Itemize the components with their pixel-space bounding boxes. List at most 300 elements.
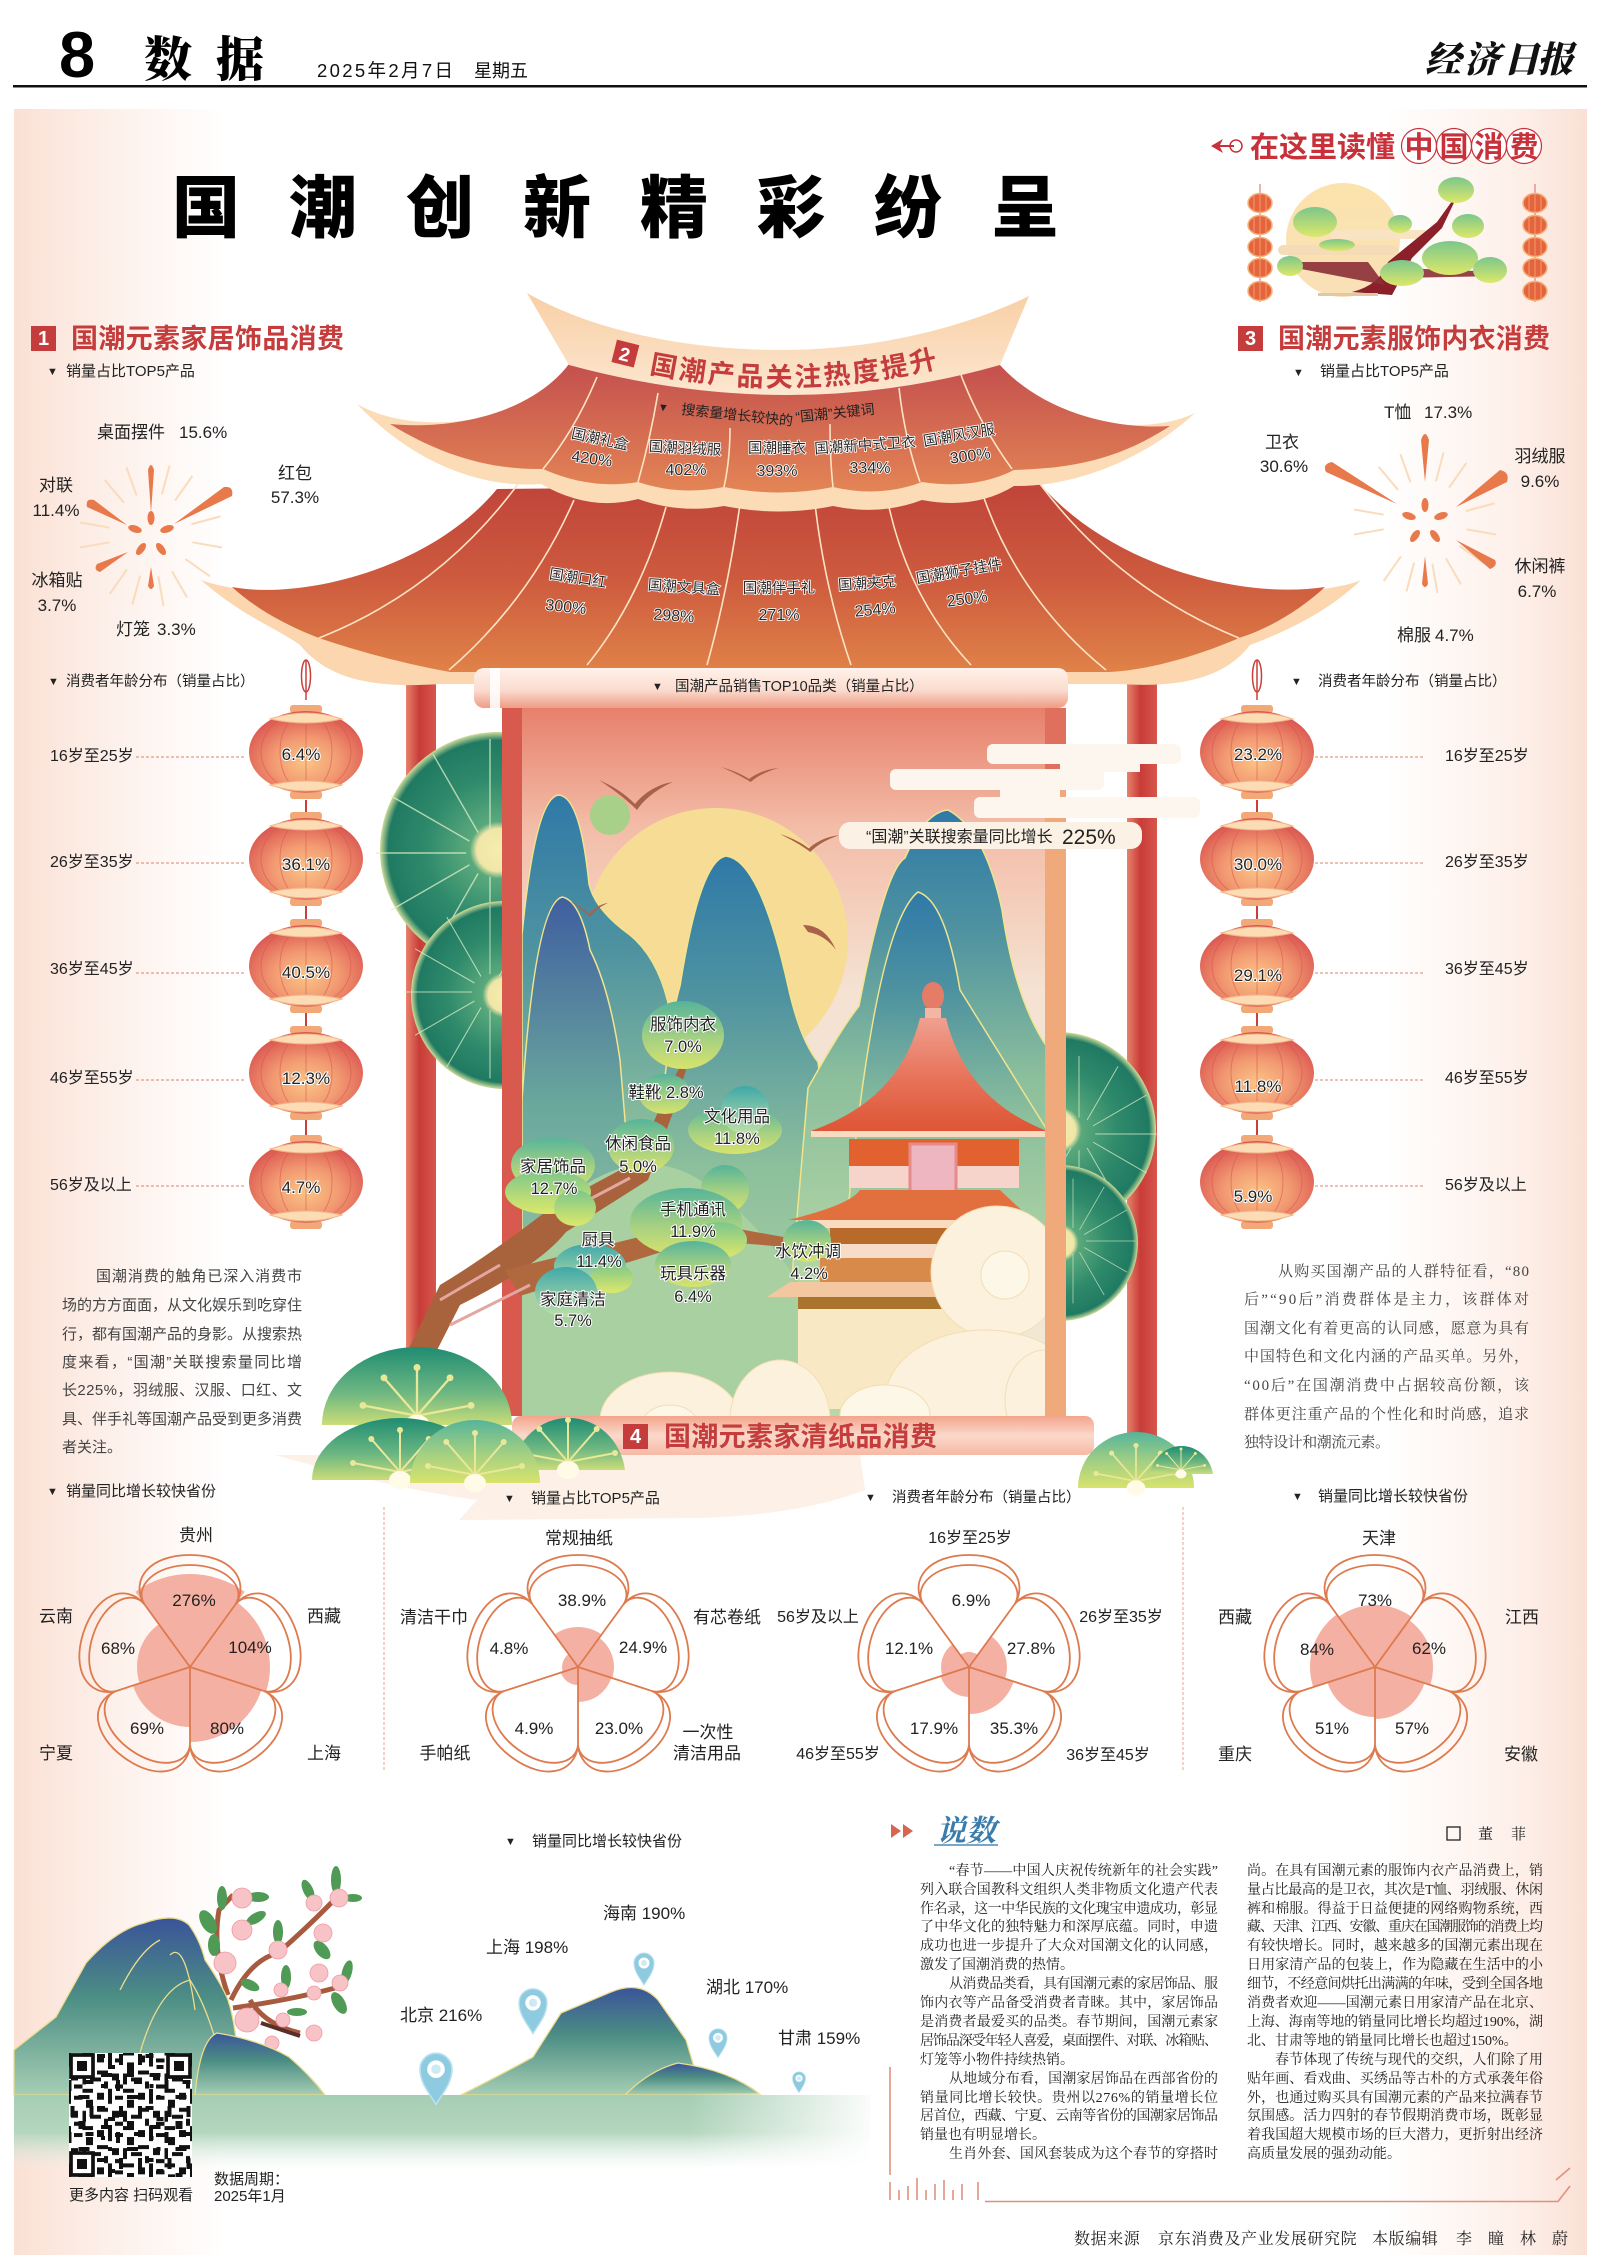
hill: middle — [625, 2063, 761, 2095]
commentary column 1: 作名录，这一中华民族的文化瑰宝申遗成功，彰显 — [920, 1900, 1218, 1917]
subhead: province growth B: 销量同比增长较快省份 — [1318, 1487, 1468, 1505]
tree trunk — [408, 1066, 800, 1360]
flower chart: paper age — [777, 1529, 1163, 1787]
flower chart: paper top5: 一次性 — [682, 1723, 734, 1742]
subhead: province growth A: ▼ — [47, 1486, 58, 1498]
age labels: home decor: 56岁及以上 — [50, 1176, 132, 1194]
age labels: home decor: 26岁至35岁 — [50, 853, 134, 871]
pine: 手机通讯: 手机通讯 — [660, 1200, 726, 1219]
keyword: 国潮伴手礼: 271% — [759, 607, 799, 624]
top scroll rod: ▼ — [652, 681, 663, 693]
subhead: province growth B: ▼ — [1292, 1491, 1303, 1503]
text block: right intro: 后”“90后”消费群体是主力，该群体对 — [1244, 1290, 1529, 1308]
roof: upper tier tiles — [390, 364, 1170, 492]
firework chart: apparel top5: 羽绒服 — [1514, 447, 1566, 466]
keyword: 国潮新中式卫衣 — [814, 433, 916, 477]
firework chart: home decor top5: 3.3% — [157, 620, 196, 639]
pine: 文化用品: 11.8% — [714, 1130, 760, 1148]
flower chart: paper provinces — [1218, 1529, 1539, 1787]
scene: landscape — [522, 794, 1045, 1416]
subhead: apparel top5: 销量占比TOP5产品 — [1320, 363, 1449, 380]
flower chart: paper top5: 4.8% — [490, 1639, 528, 1658]
footer credits: 蔚 — [1552, 2230, 1569, 2248]
subhead: apparel age: 消费者年龄分布（销量占比） — [1318, 673, 1506, 690]
text block: left intro: 度来看，“国潮”关联搜索量同比增 — [62, 1354, 302, 1371]
series badge: 中国消费 — [1404, 131, 1539, 164]
firework chart: apparel top5: 6.7% — [1518, 582, 1556, 601]
keyword: 国潮狮子挂件 — [915, 556, 1003, 611]
lantern: 46-55 — [249, 1026, 363, 1120]
age labels: home decor: 36岁至45岁 — [50, 960, 134, 978]
firework chart: apparel top5: 30.6% — [1260, 457, 1308, 476]
callout: search growth: 225% — [1062, 826, 1116, 849]
flower chart: paper provinces: 西藏 — [1218, 1608, 1252, 1627]
keyword: 国潮口红: 300% — [545, 597, 587, 618]
pine: 厨具 — [554, 1231, 633, 1293]
commentary column 2: 细节，不经意间烘托出满满的年味，受到全国各地 — [1247, 1975, 1543, 1992]
top scroll rod: 国潮产品销售TOP10品类（销量占比） — [675, 678, 924, 695]
callout: search growth — [839, 822, 1142, 849]
pillars — [406, 670, 1157, 1460]
scroll body — [502, 708, 1066, 1416]
pine: 玩具乐器: 6.4% — [674, 1288, 712, 1306]
map pins and labels — [400, 1904, 860, 2104]
weekday: 星期五 — [474, 61, 528, 81]
commentary column 2: 氛围感。活力四射的春节假期消费市场，既彰显 — [1247, 2107, 1543, 2124]
pine: 家庭清洁 — [535, 1267, 606, 1330]
commentary column 1: 居首位，西藏、宁夏、云南等省份的国潮家居饰品 — [920, 2107, 1218, 2124]
subhead: map: ▼ — [505, 1836, 516, 1848]
mountain: front left — [522, 896, 626, 1229]
commentary column 2: 日用家清产品的包装上，作为隐藏在生活中的小 — [1247, 1956, 1544, 1973]
text block: right intro: 国潮文化有着更高的认同感，愿意为具有 — [1244, 1319, 1529, 1337]
commentary column 1: 成功也进一步提升了大众对国潮文化的认同感， — [920, 1937, 1218, 1954]
flower chart: home decor provinces: 上海 — [307, 1744, 341, 1763]
flower chart: paper age: 26岁至35岁 — [1079, 1608, 1163, 1626]
flower chart: home decor provinces: 69% — [130, 1719, 164, 1738]
keyword: 国潮新中式卫衣: 334% — [850, 460, 890, 477]
pine: 文化用品: 文化用品 — [704, 1107, 770, 1126]
flower chart: paper top5: 清洁干巾 — [400, 1608, 468, 1627]
sun — [593, 808, 848, 1038]
firework chart: apparel top5: 卫衣 — [1265, 433, 1299, 452]
subhead: province growth A: 销量同比增长较快省份 — [66, 1482, 216, 1500]
pin: 甘肃: 甘肃 159% — [778, 2029, 860, 2048]
age labels: home decor: 16岁至25岁 — [50, 747, 134, 765]
lantern: 56+ — [249, 1135, 363, 1229]
mountain: back left — [522, 794, 668, 1122]
firework chart: home decor top5: 灯笼 — [116, 620, 150, 639]
lantern: 56+: 5.9% — [1234, 1187, 1272, 1206]
flower chart: paper provinces: 天津 — [1362, 1529, 1396, 1548]
flower chart: home decor provinces: 276% — [172, 1591, 216, 1610]
clouds — [600, 1206, 1045, 1416]
subhead: paper age: 消费者年龄分布（销量占比） — [892, 1489, 1080, 1506]
pin: 海南: 海南 190% — [603, 1904, 685, 1923]
pine: 水饮冲调: 水饮冲调 — [775, 1242, 841, 1261]
flower chart: paper top5 — [400, 1529, 761, 1787]
commentary column 2: 高质量发展的强劲动能。 — [1247, 2145, 1401, 2162]
flower chart: paper age: 27.8% — [1007, 1639, 1055, 1658]
age labels: apparel — [1315, 747, 1529, 1194]
pine: 休闲食品: 5.0% — [619, 1158, 657, 1176]
lantern: 36-45 — [249, 919, 363, 1013]
commentary column 2: 裤和棉服。得益于日益便捷的网络购物系统，西 — [1247, 1900, 1543, 1917]
keyword: 国潮夹克 — [838, 573, 897, 621]
lantern column: apparel age — [1200, 660, 1314, 1229]
text block: left intro: 具、伴手礼等国潮产品受到更多消费 — [62, 1410, 302, 1428]
QR caption: 更多内容 扫码观看 — [69, 2187, 193, 2204]
flower chart: paper top5: 常规抽纸 — [545, 1529, 613, 1548]
pin: 湖北: 湖北 170% — [706, 1978, 788, 1997]
keyword: 国潮口红 — [545, 566, 608, 618]
series badge: 在这里读懂 — [1250, 131, 1395, 164]
commentary column 1: 灯笼等小物件持续热销。 — [920, 2051, 1074, 2068]
lantern: 16-25 — [1200, 705, 1314, 799]
temple roof — [201, 293, 1361, 686]
age labels: apparel: 46岁至55岁 — [1445, 1069, 1529, 1087]
lantern: 26-35: 36.1% — [282, 855, 330, 874]
keyword: 国潮狮子挂件: 国潮狮子挂件 — [915, 556, 1003, 587]
section 1 heading: 1 — [38, 328, 49, 350]
mountain: centre — [664, 856, 840, 1416]
keyword: 国潮礼盒: 国潮礼盒 — [570, 425, 631, 454]
flower chart: paper provinces: 57% — [1395, 1719, 1429, 1738]
commentary column 1: 生肖外套、国风套装成为这个春节的穿搭时 — [949, 2145, 1218, 2162]
subhead: paper top5: 销量占比TOP5产品 — [531, 1490, 660, 1507]
keyword: 国潮狮子挂件: 250% — [946, 588, 989, 611]
commentary column 1: 销量也有明显增长。 — [920, 2126, 1046, 2143]
title: 国潮创新精彩纷呈 — [172, 171, 1059, 247]
footer credits: 李 — [1456, 2230, 1473, 2248]
firework chart: home decor top5: 冰箱贴 — [32, 571, 82, 590]
age labels: home decor — [50, 747, 245, 1194]
flower chart: paper age: 35.3% — [990, 1719, 1038, 1738]
bottom scroll rod — [512, 1416, 1094, 1455]
keyword: 国潮羽绒服: 国潮羽绒服 — [648, 438, 722, 459]
keyword: 国潮夹克: 国潮夹克 — [838, 573, 897, 594]
text block: left intro: 国潮消费的触角已深入消费市 — [96, 1268, 302, 1285]
lantern: 46-55 — [1200, 1026, 1314, 1120]
keyword: 国潮伴手礼 — [743, 580, 815, 624]
pine: 鞋靴 — [628, 1074, 704, 1114]
flower chart: home decor provinces — [39, 1526, 341, 1787]
text block: right intro: 从购买国潮产品的人群特征看，“80 — [1278, 1263, 1529, 1280]
firework chart: home decor top5: 红包 — [278, 464, 312, 483]
flower chart: paper age: 56岁及以上 — [777, 1608, 859, 1626]
pin: 甘肃 — [778, 2029, 860, 2093]
pine: 家居饰品: 家居饰品 — [520, 1157, 586, 1176]
flower chart: paper provinces: 73% — [1358, 1591, 1392, 1610]
age labels: apparel: 16岁至25岁 — [1445, 747, 1529, 765]
flower chart: home decor provinces: 云南 — [39, 1607, 73, 1626]
date: 2025年2月7日 — [317, 60, 453, 81]
subhead: paper top5: ▼ — [504, 1493, 515, 1505]
roof: upper tier edge — [357, 370, 1195, 512]
lantern: 36-45: 40.5% — [282, 963, 330, 982]
roof: lower tier tiles — [232, 484, 1325, 672]
text block: left intro: 场的方方面面，从文化娱乐到吃穿住 — [62, 1297, 302, 1314]
lantern: 56+ — [1200, 1135, 1314, 1229]
blossom branch — [195, 1866, 362, 2050]
commentary column 2: 贴年画、看戏曲、买绣品等古朴的方式承袭年俗 — [1247, 2070, 1543, 2087]
flower chart: paper top5: 清洁用品 — [673, 1744, 741, 1763]
commentary column 2: 北、甘肃等地的销量同比增长也超过150%。 — [1247, 2032, 1518, 2049]
flower chart: paper provinces: 51% — [1315, 1719, 1349, 1738]
pine: 服饰内衣: 服饰内衣 — [650, 1015, 716, 1034]
flower chart: paper top5: 23.0% — [595, 1719, 643, 1738]
keyword: 国潮睡衣 — [748, 440, 806, 480]
scroll side stripes — [502, 708, 1066, 1416]
data period: 2025年1月 — [214, 2188, 286, 2205]
commentary column 1: 居饰品深受年轻人喜爱，桌面摆件、对联、冰箱贴、 — [920, 2032, 1218, 2049]
commentary column 2 — [1247, 1862, 1544, 2162]
mountain: left — [14, 1918, 240, 2095]
newspaper logo: 经济日报 — [1425, 40, 1578, 80]
pine: 手机通讯 — [630, 1188, 747, 1258]
temple — [767, 982, 1047, 1409]
icon: arrow — [1211, 139, 1234, 153]
footer credits: 本版编辑 — [1372, 2230, 1438, 2248]
pine: unlabelled tuft — [701, 1165, 749, 1213]
pine: 鞋靴: 鞋靴 2.8% — [628, 1083, 704, 1102]
keyword: 国潮新中式卫衣: 国潮新中式卫衣 — [814, 433, 916, 458]
text block: left intro: 者关注。 — [62, 1439, 122, 1456]
pine: 文化用品 — [688, 1086, 782, 1154]
flower chart: home decor provinces: 80% — [210, 1719, 244, 1738]
roof: lower tier edge — [201, 580, 1361, 685]
flower chart: paper age: 36岁至45岁 — [1066, 1746, 1150, 1764]
subhead: paper age: ▼ — [865, 1492, 876, 1504]
footer credits: 林 — [1520, 2230, 1537, 2248]
byline: 董 — [1478, 1825, 1493, 1843]
pine: 手机通讯: 11.9% — [670, 1223, 716, 1241]
flower chart: paper age: 46岁至55岁 — [796, 1745, 880, 1763]
subhead: home top5: 销量占比TOP5产品 — [66, 363, 195, 380]
lantern: 26-35 — [249, 812, 363, 906]
lantern: 56+: 4.7% — [282, 1178, 320, 1197]
commentary column 2: 藏、天津、江西、安徽、重庆在国潮服饰的消费上均 — [1247, 1918, 1543, 1935]
lantern: 36-45: 29.1% — [1234, 966, 1282, 985]
footer credits: 京东消费及产业发展研究院 — [1158, 2230, 1357, 2248]
commentary column 2: 春节体现了传统与现代的交织，人们除了用 — [1275, 2051, 1543, 2068]
top scroll rod — [474, 668, 1068, 708]
text block: right intro: 中国特色和文化内涵的产品买单。另外， — [1244, 1348, 1529, 1365]
byline — [1447, 1825, 1526, 1843]
hill: left — [195, 2033, 325, 2095]
data period: 数据周期： — [214, 2171, 289, 2188]
keyword: 国潮夹克: 254% — [854, 600, 896, 621]
firework chart: apparel top5: 17.3% — [1424, 403, 1472, 422]
pine: 休闲食品 — [605, 1119, 674, 1176]
flower chart: home decor provinces: 西藏 — [307, 1607, 341, 1626]
commentary column 2: 消费者欢迎——国潮元素日用家清产品在北京、 — [1247, 1994, 1543, 2011]
firework chart: home decor top5: 11.4% — [33, 501, 79, 520]
subhead: home age: 消费者年龄分布（销量占比） — [66, 673, 254, 690]
water band — [14, 2093, 880, 2173]
keyword: 国潮口红: 国潮口红 — [548, 566, 608, 591]
keyword: 国潮风汉服 — [922, 421, 997, 468]
section 2 heading: 2 — [617, 344, 632, 367]
pin: 湖北 — [706, 1978, 788, 2058]
pine: 服饰内衣 — [642, 1001, 724, 1069]
footer credits: 数据来源 — [1074, 2230, 1141, 2248]
flower chart: home decor provinces: 宁夏 — [39, 1744, 73, 1763]
section 3 heading: 3 — [1245, 328, 1256, 350]
section 1 heading: 国潮元素家居饰品消费 — [71, 324, 344, 354]
commentary column 2: 量占比最高的是卫衣，其次是T恤、羽绒服、休闲 — [1247, 1881, 1543, 1898]
pin: 北京 — [400, 2006, 482, 2104]
keyword: 国潮风汉服: 300% — [949, 445, 992, 468]
commentary column 1: 列入联合国教科文组织人类非物质文化遗产代表 — [920, 1881, 1218, 1898]
pine fans: lower left — [312, 1347, 625, 1492]
lantern: 46-55: 11.8% — [1235, 1077, 1281, 1096]
footer credits — [1074, 2230, 1569, 2248]
flower chart: paper top5: 有芯卷纸 — [693, 1608, 761, 1627]
subhead: keywords: 搜索量增长较快的 — [681, 401, 794, 429]
age labels: apparel: 26岁至35岁 — [1445, 853, 1529, 871]
masthead — [13, 18, 1587, 91]
subhead: home age: ▼ — [48, 676, 59, 688]
pine: 家居饰品: 12.7% — [531, 1180, 578, 1198]
commentary column 1: 从地域分布看，国潮家居饰品在西部省份的 — [949, 2070, 1218, 2087]
commentary column 2: 上海、海南等地的销量同比增长均超过190%，湖 — [1247, 2013, 1543, 2030]
commentary column 1: 了中华文化的独特魅力和深厚底蕴。同时，申遗 — [920, 1918, 1218, 1935]
pine: 水饮冲调: 4.2% — [790, 1265, 828, 1283]
text block: right intro: 独特设计和潮流元素。 — [1244, 1434, 1390, 1451]
subhead: apparel age: ▼ — [1291, 676, 1302, 688]
pine: 休闲食品: 休闲食品 — [605, 1134, 671, 1153]
keyword: 国潮礼盒 — [570, 425, 631, 471]
keyword: 国潮睡衣: 国潮睡衣 — [748, 440, 806, 457]
cloud strips — [890, 744, 1200, 818]
text block: left intro: 长225%，羽绒服、汉服、口红、文 — [62, 1382, 302, 1399]
flower chart: paper top5: 38.9% — [558, 1591, 606, 1610]
lantern: 26-35 — [1200, 812, 1314, 906]
keyword: 国潮羽绒服 — [648, 438, 722, 479]
section 3 heading: 国潮元素服饰内衣消费 — [1278, 324, 1550, 354]
section 4 heading: 4 — [630, 1426, 642, 1448]
text block: right intro: 群体更注重产品的个性化和时尚感，追求 — [1244, 1405, 1529, 1423]
flower chart: paper top5: 手帕纸 — [420, 1744, 470, 1763]
commentary column 2: 有较快增长。同时，越来越多的国潮元素出现在 — [1247, 1937, 1543, 1954]
firework chart: apparel top5: 9.6% — [1521, 472, 1559, 491]
pin: 北京: 北京 216% — [400, 2006, 482, 2025]
pin: 上海 — [486, 1938, 568, 2034]
section name: 数据 — [144, 34, 264, 87]
green foothill — [522, 1164, 810, 1420]
firework chart: home decor top5: 15.6% — [179, 423, 227, 442]
lantern column: home decor age — [249, 660, 363, 1229]
byline: 菲 — [1511, 1826, 1526, 1843]
flower chart: paper provinces: 安徽 — [1504, 1745, 1538, 1764]
pine: 家庭清洁: 家庭清洁 — [540, 1290, 606, 1309]
firework chart: home decor top5: 对联 — [39, 476, 73, 495]
keyword: 国潮睡衣: 393% — [757, 463, 797, 480]
flower chart: paper provinces: 84% — [1300, 1640, 1334, 1659]
firework chart: home decor top5: 桌面摆件 — [97, 423, 165, 442]
text block: right intro: “00后”在国潮消费中占据较高份额，该 — [1244, 1376, 1530, 1394]
commentary column 1: 饰内衣等产品备受消费者青睐。其中，家居饰品 — [920, 1994, 1218, 2011]
lantern: 36-45 — [1200, 919, 1314, 1013]
flower chart: paper age: 6.9% — [952, 1591, 990, 1610]
page number: 8 — [59, 18, 95, 91]
mountain: right — [790, 810, 1047, 1300]
firework chart: apparel top5: 休闲裤 — [1514, 557, 1566, 576]
lantern: 16-25 — [249, 705, 363, 799]
text block: left intro: 行，都有国潮产品的身影。从搜索热 — [62, 1326, 302, 1343]
landscape strip — [14, 1866, 880, 2173]
firework chart: apparel top5 — [1260, 403, 1566, 645]
flower chart: paper age: 17.9% — [910, 1719, 958, 1738]
pine: 厨具: 厨具 — [582, 1231, 614, 1249]
flower chart: paper age: 12.1% — [885, 1639, 933, 1658]
keyword: 国潮风汉服: 国潮风汉服 — [922, 421, 997, 450]
commentary heading — [891, 1815, 1001, 1848]
keyword: 国潮文具盒 — [647, 576, 721, 626]
series badge — [1211, 128, 1542, 164]
keyword: 国潮伴手礼: 国潮伴手礼 — [743, 580, 815, 597]
lantern: 16-25: 23.2% — [1234, 745, 1282, 764]
pine: 厨具: 11.4% — [576, 1253, 622, 1271]
flower chart: paper age: 16岁至25岁 — [928, 1529, 1012, 1547]
subhead: home top5: ▼ — [47, 366, 58, 378]
pine fans: lower right — [1078, 1432, 1213, 1496]
scroll: top10 categories — [502, 708, 1066, 1416]
flower chart: home decor provinces: 104% — [228, 1638, 272, 1657]
pine: 玩具乐器: 玩具乐器 — [660, 1264, 726, 1283]
pine: 家庭清洁: 5.7% — [554, 1312, 592, 1330]
subhead: map: 销量同比增长较快省份 — [532, 1832, 682, 1850]
QR code — [69, 2053, 192, 2177]
commentary column 1: 是消费者最爱买的品类。春节期间，国潮元素家 — [920, 2013, 1218, 2030]
mountain: middle — [461, 1988, 700, 2095]
flower chart: home decor provinces: 68% — [101, 1639, 135, 1658]
keyword: 国潮文具盒: 298% — [653, 607, 695, 626]
umbrellas — [376, 732, 1157, 1321]
pin: 海南 — [603, 1904, 685, 1985]
text block: right intro — [1244, 1263, 1530, 1451]
pine: 家居饰品 — [505, 1137, 596, 1226]
flower chart: paper top5: 24.9% — [619, 1638, 667, 1657]
commentary column 1 — [920, 1862, 1218, 2162]
section 2 heading: 国潮产品关注热度提升 — [650, 346, 935, 389]
pine tree chart: top10 categories — [408, 1001, 841, 1360]
keyword: 国潮文具盒: 国潮文具盒 — [647, 576, 721, 599]
commentary column 1: 激发了国潮消费的热情。 — [920, 1956, 1074, 1973]
pin: 上海: 上海 198% — [486, 1938, 568, 1957]
firework chart: apparel top5: 4.7% — [1435, 626, 1474, 645]
commentary column 2: 外，也通过购买具有国潮元素的产品来拉满春节 — [1247, 2089, 1543, 2106]
commentary column 2: 尚。在具有国潮元素的服饰内衣产品消费上，销 — [1247, 1862, 1543, 1879]
age labels: apparel: 36岁至45岁 — [1445, 960, 1529, 978]
age labels: home decor: 46岁至55岁 — [50, 1069, 134, 1087]
firework chart: apparel top5: 棉服 — [1397, 626, 1431, 645]
keyword: 国潮羽绒服: 402% — [666, 462, 706, 479]
firework chart: home decor top5: 3.7% — [38, 596, 76, 615]
callout: search growth: “国潮”关联搜索量同比增长 — [866, 828, 1053, 846]
illustration: sun and pine with lanterns — [1248, 177, 1547, 302]
flower chart: home decor provinces: 贵州 — [179, 1526, 213, 1545]
lantern: 16-25: 6.4% — [282, 745, 320, 764]
pine: 服饰内衣: 7.0% — [664, 1038, 702, 1056]
firework chart: home decor top5: 57.3% — [271, 488, 319, 507]
data period — [214, 2171, 289, 2205]
lantern: 46-55: 12.3% — [282, 1069, 330, 1088]
birds — [571, 767, 839, 950]
pine: 水饮冲调 — [775, 1220, 841, 1283]
firework chart: home decor top5 — [32, 423, 319, 639]
